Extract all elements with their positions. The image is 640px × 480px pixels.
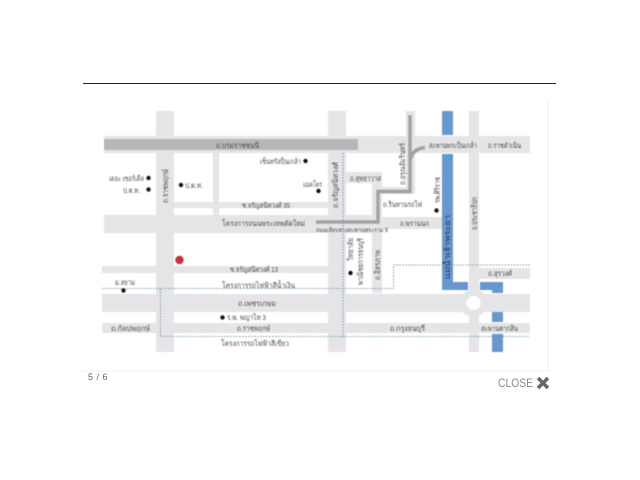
vertical map labels: วิทยาลัย: [346, 238, 355, 262]
vertical map labels: [161, 143, 479, 285]
vertical rail project route: [342, 153, 344, 337]
road: Borommaratchachonnani elevated: [104, 139, 358, 150]
horizontal map labels: ถ.สุทธาวาส: [350, 174, 381, 183]
new road project line: [316, 115, 425, 222]
vertical map labels: แม่น้ำเจ้าพระยา: [442, 215, 452, 279]
horizontal map labels: ถ.ราชดำเนิน: [488, 141, 521, 150]
horizontal map labels: ถ.กรุงธนบุรี: [390, 324, 425, 333]
horizontal map labels: ถ.สุรวงศ์: [488, 269, 512, 278]
horizontal map labels: ถ.พรานนก: [400, 219, 429, 228]
horizontal map labels: เซ็นทรัลปิ่นเกล้า: [260, 156, 301, 166]
horizontal map labels: โครงการรถไฟฟ้าสีเขียว: [221, 339, 289, 348]
horizontal map labels: ถ.รินทานรถไฟ: [383, 200, 422, 209]
horizontal map labels: เดอะ เซอร์เคิล: [109, 174, 144, 183]
vertical map labels: ถ.ราชพฤกษ์: [161, 169, 170, 203]
horizontal map labels: สะพานตากสิน: [481, 324, 518, 333]
horizontal map labels: ซ.จรัญสนิทวงศ์ 35: [242, 201, 290, 210]
horizontal map labels: ม.สยาม: [115, 278, 135, 287]
vertical map labels: ถ.ประชาธิปก: [470, 197, 479, 230]
vertical map labels: รพ.ศิริราช: [433, 177, 442, 203]
horizontal map labels: ถ.บรมราชชนนี: [216, 141, 259, 150]
image counter: 5 / 6: [88, 372, 108, 382]
vertical map labels: ถ.อรุณอัมรินทร์: [398, 143, 407, 185]
horizontal map labels: ถ.ราชพฤกษ์: [237, 324, 270, 333]
horizontal map labels: สะพานพระปิ่นเกล้า: [429, 140, 477, 150]
landmark dots: [121, 159, 439, 320]
icon: close cross: [538, 378, 548, 388]
horizontal map labels: ป.ต.ท.: [185, 181, 203, 190]
vertical map labels: พาณิชยการธนบุรี: [356, 238, 365, 285]
horizontal map labels: ซ.จรัญสนิทวงศ์ 13: [230, 265, 278, 274]
horizontal map labels: โครงการถนนพระเทพตัดใหม่: [222, 219, 305, 228]
horizontal map labels: ถ.กัลปพฤกษ์: [111, 324, 150, 333]
blue line rail project route: [102, 265, 530, 288]
horizontal map labels: ป.ต.ท.: [123, 186, 140, 195]
vertical map labels: ถ.จรัญสนิทวงศ์: [331, 162, 340, 208]
vertical map labels: ถ.อิสรภาพ: [373, 250, 382, 280]
horizontal map labels: โครงการรถไฟฟ้าสีน้ำเงิน: [222, 280, 295, 290]
road network: [102, 111, 530, 352]
location marker: [175, 256, 184, 264]
green line rail project route: [160, 289, 530, 336]
panel: map: [102, 111, 530, 352]
close label: CLOSE: [498, 376, 533, 390]
horizontal map labels: ถนนเลียบทางสะพานพระราม 8: [316, 226, 389, 234]
horizontal map labels: แมคโคร: [303, 180, 322, 189]
horizontal map labels: [109, 140, 521, 348]
horizontal map labels: ร.พ. พญาไท 3: [227, 313, 266, 322]
roundabout centre: [466, 296, 480, 310]
horizontal map labels: ถ.เพชรเกษม: [238, 299, 276, 308]
panel: map frame: [83, 100, 548, 371]
river: Chao Phraya: [442, 111, 503, 352]
top rule: [83, 83, 556, 84]
